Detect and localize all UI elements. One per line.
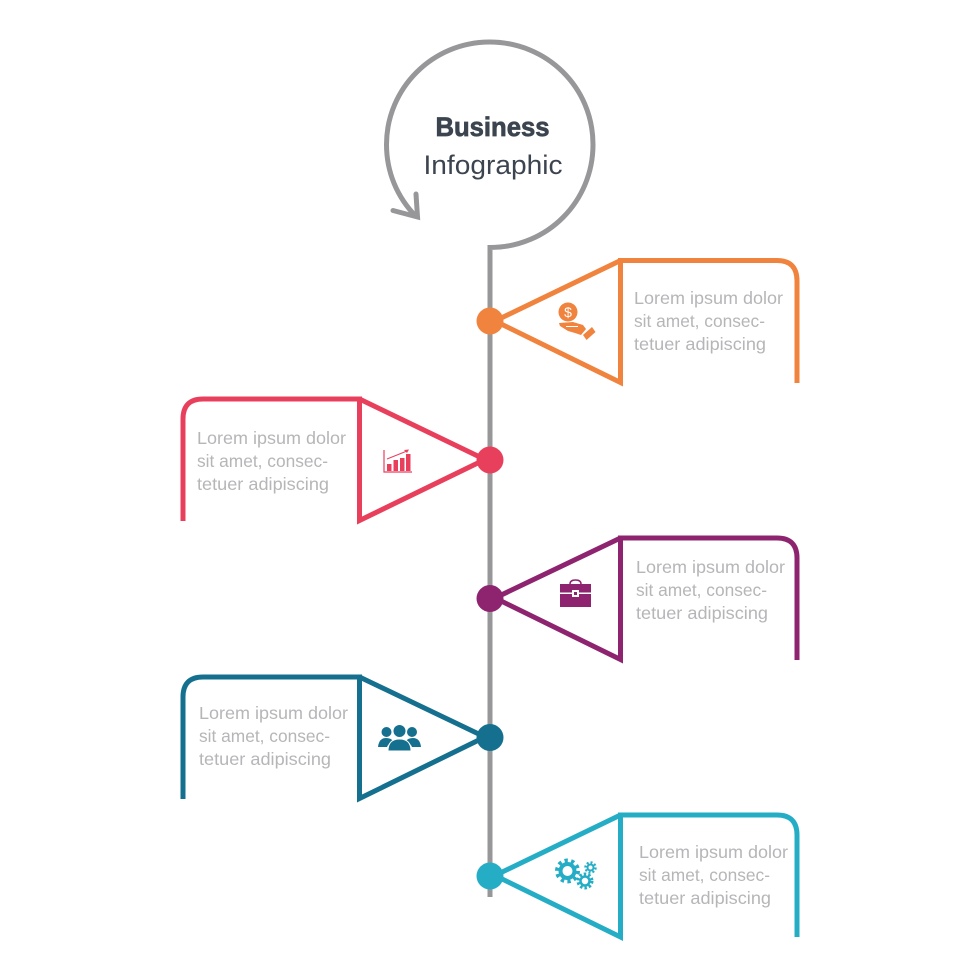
step 4: teal team [183, 677, 504, 799]
orange text block: tetuer adipiscing [634, 334, 766, 354]
teal flag outline [183, 677, 485, 799]
purple timeline dot [476, 585, 504, 612]
orange text block [634, 288, 783, 354]
red flag outline [183, 399, 485, 521]
title [424, 112, 562, 180]
purple text block: sit amet, consec- [636, 580, 767, 600]
step 1: orange finance [476, 260, 797, 383]
cyan timeline dot [476, 862, 504, 890]
step 5: cyan settings [476, 815, 797, 937]
red text block: Lorem ipsum dolor [197, 428, 346, 448]
icon: hand holding coin: $ [564, 304, 572, 320]
icon: gears [557, 860, 596, 888]
icon: hand holding coin [558, 302, 596, 340]
step 2: red growth [183, 399, 504, 521]
teal timeline dot [476, 724, 504, 751]
icon: group of people [378, 724, 421, 751]
teal text block: sit amet, consec- [199, 726, 330, 746]
timeline spine with circular arrow [386, 42, 593, 897]
red text block [197, 428, 346, 494]
orange flag outline [495, 260, 797, 383]
orange text block: sit amet, consec- [634, 311, 765, 331]
cyan text block [639, 842, 788, 908]
icon: briefcase [560, 580, 591, 607]
cyan text block: sit amet, consec- [639, 865, 770, 885]
purple text block [636, 557, 785, 623]
orange timeline dot [476, 308, 504, 334]
title: Business [436, 112, 550, 142]
teal text block: Lorem ipsum dolor [199, 703, 348, 723]
icon: bar chart [384, 450, 412, 472]
orange text block: Lorem ipsum dolor [634, 288, 783, 308]
teal text block: tetuer adipiscing [199, 749, 331, 769]
teal text block [199, 703, 348, 769]
red text block: tetuer adipiscing [197, 474, 329, 494]
title: Infographic [424, 150, 562, 180]
step 3: purple briefcase [476, 538, 797, 660]
cyan text block: tetuer adipiscing [639, 888, 771, 908]
red text block: sit amet, consec- [197, 451, 328, 471]
red timeline dot [476, 446, 504, 474]
cyan text block: Lorem ipsum dolor [639, 842, 788, 862]
purple text block: Lorem ipsum dolor [636, 557, 785, 577]
purple text block: tetuer adipiscing [636, 603, 768, 623]
purple flag outline [495, 538, 797, 660]
cyan flag outline [495, 815, 797, 937]
